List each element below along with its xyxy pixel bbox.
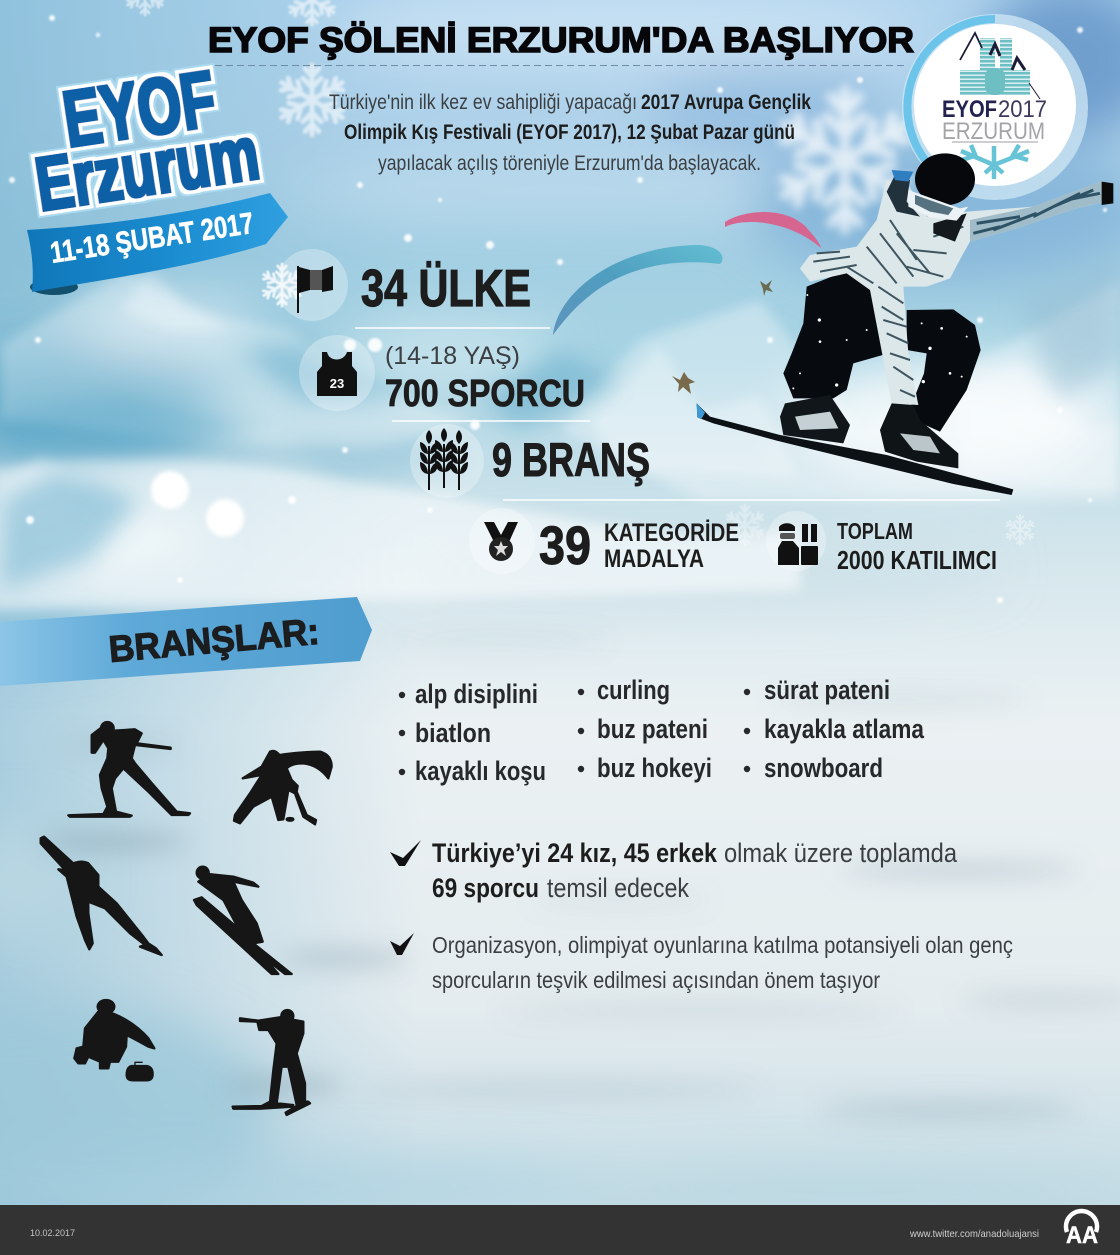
intro text block: Olimpik Kış Festivali (EYOF 2017), 12 Şubat Pazar günü (344, 121, 795, 144)
fact text: temsil edecek (547, 873, 689, 903)
fact text: sporcuların teşvik edilmesi açısından önem taşıyor (432, 967, 880, 993)
castle icon (960, 33, 1040, 99)
column 2: curling (597, 675, 670, 705)
board (697, 403, 1013, 495)
column 2: buz pateni (597, 714, 708, 744)
decorative snowflakes (125, 0, 1035, 545)
teal paraglider wing (553, 245, 723, 335)
fact text: 69 sporcu (432, 873, 539, 903)
column 3: snowboard (764, 753, 883, 783)
event logo badge (902, 14, 1088, 200)
intro text block (329, 91, 811, 175)
stat: medals (469, 508, 739, 576)
logo year: 2017 (998, 96, 1047, 123)
column 2: buz hokeyi (597, 753, 712, 783)
fact: Turkish team (390, 838, 958, 903)
stat: athletes (299, 335, 585, 415)
icon: skier and skis (778, 523, 818, 565)
column 2 (578, 675, 712, 783)
branches list (399, 675, 925, 786)
stat text: 9 BRANŞ (492, 433, 650, 486)
silhouette: ski jumper (194, 867, 292, 974)
ribbon (27, 193, 288, 292)
banner heading: BRANŞLAR: (107, 611, 321, 670)
ribbon date: 11-18 ŞUBAT 2017 (48, 207, 256, 270)
label line 1: KATEGORİDE (604, 519, 739, 547)
circle backdrop (766, 511, 826, 571)
column 3 (744, 675, 925, 783)
stat: countries (276, 249, 531, 321)
website: www.twitter.com/anadoluajansi (909, 1228, 1039, 1240)
fact text: Organizasyon, olimpiyat oyunlarına katılma potansiyeli olan genç (432, 932, 1013, 958)
near leg (783, 271, 891, 398)
icon: medal (484, 522, 518, 561)
circle backdrop (299, 335, 375, 411)
fact text (432, 932, 1013, 993)
fact text: Türkiye’yi 24 kız, 45 erkek (432, 838, 718, 868)
stat: branches (410, 424, 650, 498)
silhouette: cross-country skier (68, 722, 190, 817)
intro text block: yapılacak açılış töreniyle Erzurum'da başlayacak. (378, 152, 761, 175)
title: EYOF ŞÖLENİ ERZURUM'DA BAŞLIYOR (208, 21, 914, 60)
emblem text: EYOF (58, 53, 221, 164)
icon: wheat (420, 428, 468, 490)
label line 2: MADALYA (604, 545, 704, 573)
icon: check mark (390, 933, 414, 955)
silhouette: hockey goalie (234, 751, 332, 824)
intro text block: Türkiye'nin ilk kez ev sahipliği yapacağı (329, 91, 637, 114)
athlete silhouettes (41, 722, 332, 1115)
age text: (14-18 YAŞ) (385, 342, 520, 370)
icon: flag (297, 266, 333, 313)
snowboarder (697, 153, 1113, 495)
jacket (800, 180, 1113, 405)
label line 2: 2000 KATILIMCI (837, 545, 997, 575)
silhouette: speed skater (41, 837, 162, 955)
branches banner (0, 597, 372, 686)
icon: check mark (390, 840, 421, 866)
column 1: alp disiplini (415, 679, 538, 709)
front boot (780, 395, 850, 443)
EYOF Erzurum emblem (21, 48, 288, 295)
logo wordmark: EYOF (942, 96, 997, 123)
logo snowflake (961, 145, 1029, 179)
rear boot and hand (880, 403, 958, 468)
footer bar (0, 1205, 1120, 1255)
fact: organization purpose (390, 932, 1013, 993)
icon: jersey (317, 352, 357, 396)
column 1 (399, 679, 546, 786)
stat: participants (766, 511, 997, 575)
stat text: 34 ÜLKE (361, 260, 531, 318)
circle backdrop (410, 424, 484, 498)
hood (887, 175, 920, 217)
fact text: olmak üzere toplamda (724, 838, 958, 868)
small glider pilot (760, 280, 773, 296)
column 1: kayaklı koşu (415, 756, 546, 786)
date: 10.02.2017 (30, 1228, 75, 1238)
column 3: sürat pateni (764, 675, 890, 705)
ribbon curl (30, 279, 78, 295)
icon: agency logo (1066, 1211, 1098, 1249)
logo city: ERZURUM (942, 118, 1045, 145)
fact text (432, 838, 958, 903)
goggles (908, 190, 968, 221)
snow on pants (792, 294, 968, 389)
second small pilot (672, 372, 695, 394)
glove (1102, 182, 1113, 205)
jacket folds (813, 190, 1100, 397)
circle backdrop (469, 508, 535, 574)
circle backdrop (276, 249, 348, 321)
bokeh snow (9, 15, 1107, 603)
silhouette: biathlete (233, 1010, 310, 1115)
label line 1: TOPLAM (837, 518, 913, 544)
paragliders (553, 212, 821, 394)
emblem text (21, 48, 264, 228)
pink paraglider wing (725, 212, 821, 248)
helmet (915, 153, 975, 205)
sleeve shade (970, 181, 1113, 242)
collar (933, 213, 967, 242)
icon: jersey: 23 (330, 376, 344, 391)
number: 39 (539, 516, 591, 576)
icon: agency logo: AA (1066, 1222, 1098, 1249)
column 3: kayakla atlama (764, 714, 925, 744)
intro text block: 2017 Avrupa Gençlik (641, 91, 811, 114)
column 1: biatlon (415, 718, 491, 748)
silhouette: curler with stone (74, 1000, 154, 1080)
badge ring (902, 14, 1088, 200)
far leg (907, 309, 981, 432)
emblem text: Erzurum (30, 111, 264, 228)
count text: 700 SPORCU (385, 373, 585, 415)
